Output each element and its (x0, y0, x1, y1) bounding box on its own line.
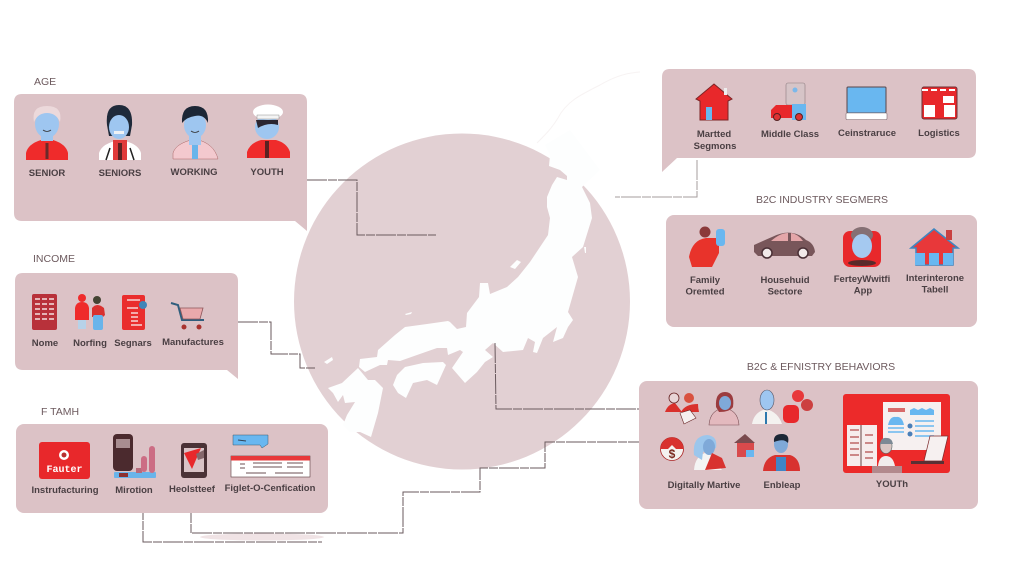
heading: AGE: AGE (34, 76, 56, 88)
label: manufactures: Manufactures (162, 337, 224, 348)
label: youth: YOUTH (250, 167, 284, 178)
icon: car (754, 233, 815, 258)
label: seniors: SENIORS (99, 168, 141, 179)
label: fertey app: App (854, 286, 872, 296)
icon: man in red jacket (763, 434, 800, 471)
smudge under the globe (200, 534, 324, 540)
icon: youth screen (843, 394, 950, 473)
heading: b2c behaviors: B2C & EFNISTRY BEHAVIORS (747, 361, 895, 373)
label: youth: YOUTh (876, 479, 908, 490)
label: interinterone tabell: Interinterone (906, 273, 964, 284)
icon: working (173, 106, 218, 159)
label: instrufacturing: Instrufacturing (31, 485, 99, 496)
map: Japan on circle (294, 130, 630, 470)
label: norfing: Norfing (73, 338, 107, 349)
label: middle class: Middle Class (761, 129, 819, 140)
heading: family: F TAMH (41, 406, 79, 418)
panel: age (14, 94, 307, 231)
icon: certificate window (231, 435, 310, 477)
label: family oriented: Oremted (685, 286, 725, 298)
label: nome: Nome (32, 338, 58, 349)
label: heolstteef: Heolstteef (169, 484, 216, 495)
label: fertey app: FerteyWwitfi (834, 274, 890, 285)
label: married segments: Segmons (694, 141, 736, 152)
label: interinterone tabell: Tabell (922, 284, 948, 296)
icon: laptop (846, 87, 887, 120)
label: married segments: Martted (697, 129, 731, 140)
label: segnars: Segnars (114, 338, 152, 349)
icon: businessman and gears (752, 390, 813, 424)
faint northern coastline (537, 72, 640, 143)
label: digitally martive: Digitally Martive (668, 480, 740, 491)
connector lines (143, 160, 697, 542)
label: figlet-o-cenfication: Figlet-O-Cenfication (225, 483, 316, 494)
icon: fauter sign (39, 442, 90, 479)
label: mirotion: Mirotion (115, 485, 153, 496)
icon: dollar compass (660, 438, 684, 461)
panel: b2c industry (666, 215, 977, 327)
panel: b2c behaviors (639, 381, 978, 509)
icon: woman with book (694, 435, 726, 470)
icon: dollar compass: $ (669, 447, 676, 461)
label: working: WORKING (171, 167, 217, 178)
icon: truck (771, 83, 806, 120)
panel: top right segments (662, 69, 976, 172)
icon: document (122, 295, 147, 330)
icon: person with phone (689, 226, 725, 267)
icon: woman (709, 392, 739, 425)
icon: two people (75, 294, 105, 330)
icon: device and bars (113, 434, 156, 478)
label: household sectore: Househuid (760, 275, 810, 286)
icon: ledger (32, 294, 57, 330)
icon: tablet (181, 443, 207, 478)
icon: seniors (99, 105, 141, 160)
icon: fauter sign: Fauter (46, 465, 83, 476)
icon: garage house (911, 229, 958, 265)
icon: senior (26, 106, 68, 160)
icon: portrait (843, 227, 881, 267)
label: senior: SENIOR (29, 168, 65, 179)
icon: people pair (665, 393, 699, 424)
icon: house (696, 84, 732, 120)
heading: b2c industry segments: B2C INDUSTRY SEGMERS (756, 194, 888, 206)
panel: family (16, 424, 328, 513)
heading: income: INCOME (33, 253, 75, 265)
icon: small house (734, 434, 755, 457)
icon: shopping cart (171, 303, 204, 330)
label: enbleap: Enbleap (764, 480, 801, 491)
panel: income (15, 273, 238, 379)
label: household sectore: Sectore (768, 286, 802, 298)
label: construction: Ceinstraruce (838, 128, 896, 139)
label: family oriented: Family (690, 275, 720, 286)
icon: youth (247, 104, 290, 158)
label: logistics: Logistics (918, 128, 960, 139)
icon: storefront (922, 87, 957, 119)
